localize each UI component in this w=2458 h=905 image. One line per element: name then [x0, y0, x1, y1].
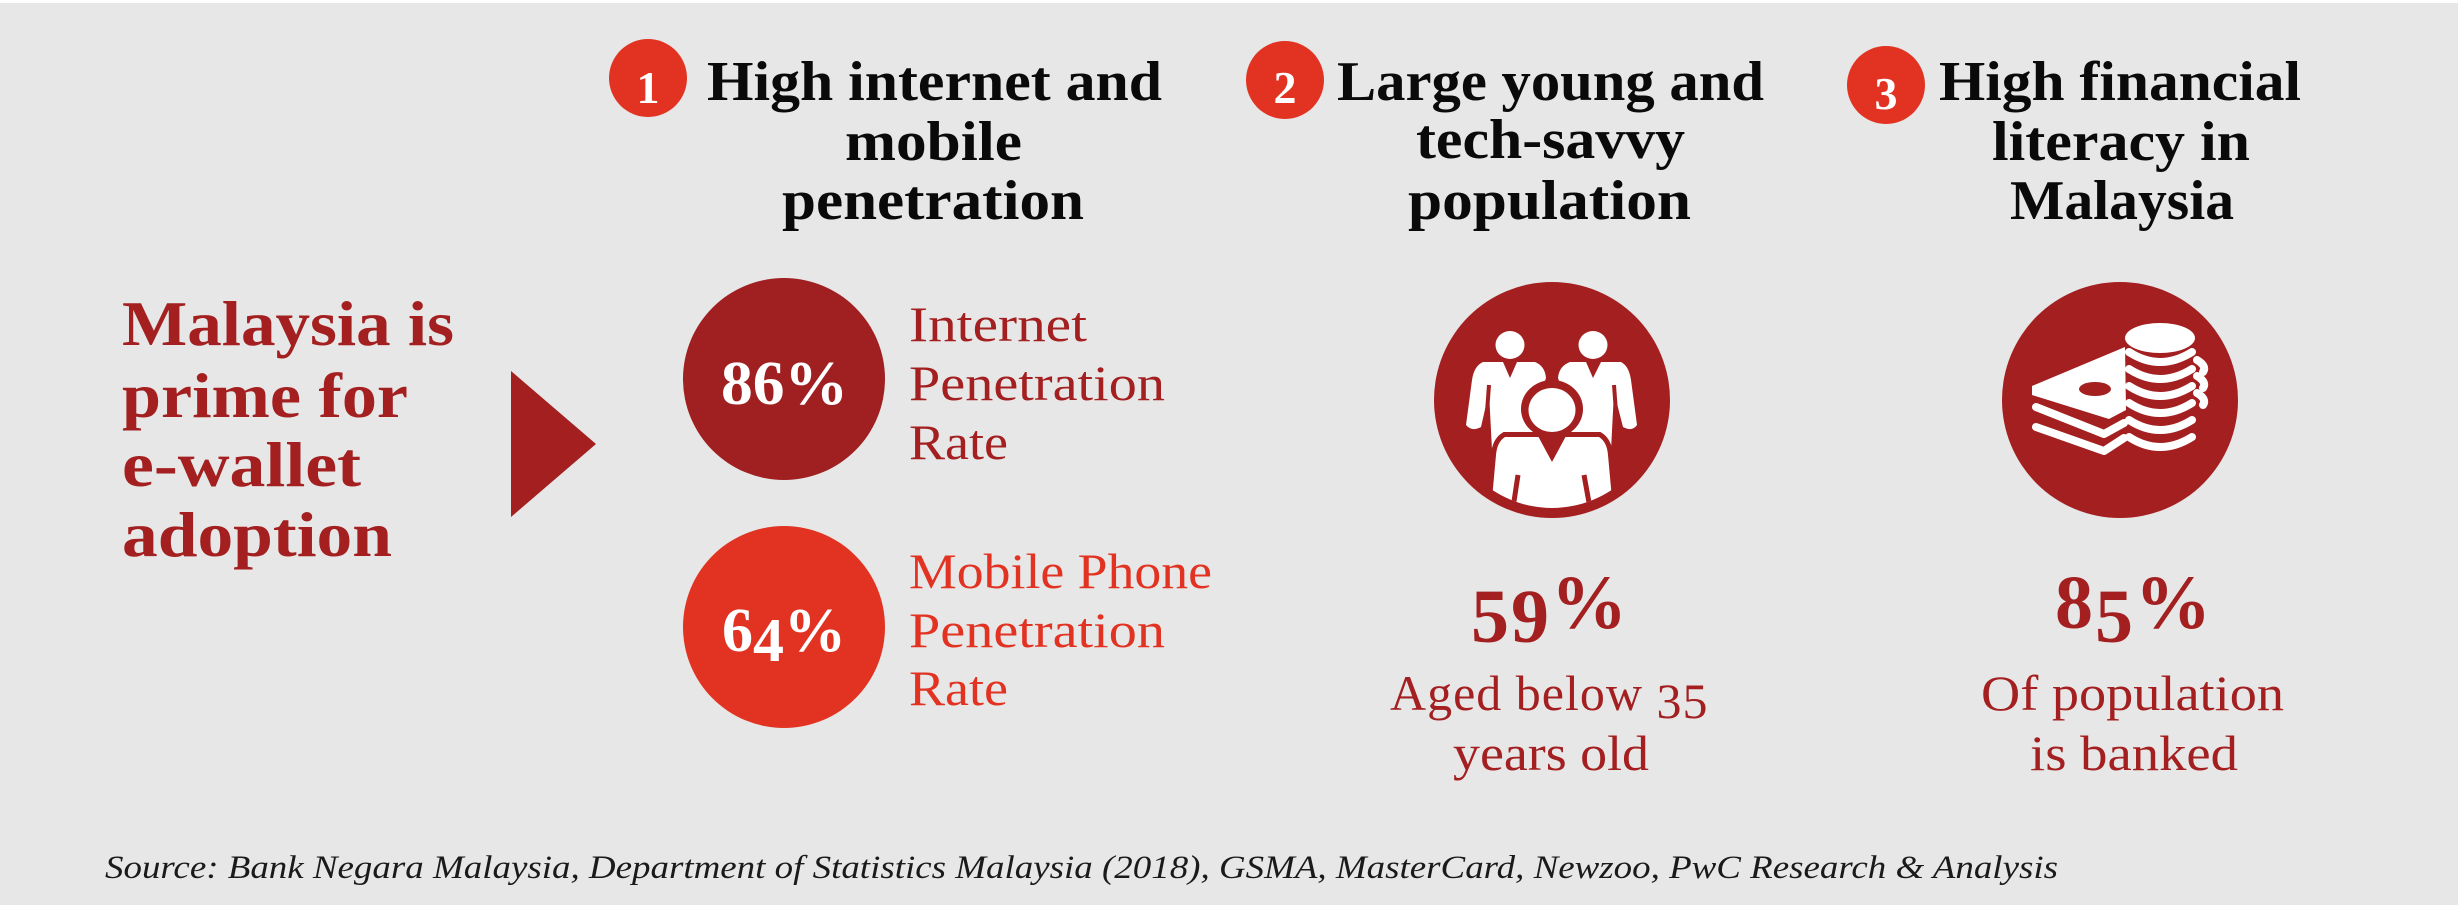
icon: banknotes and coin stack: [2002, 282, 2238, 518]
heading: high internet and mobile penetration: penetration: [782, 170, 1084, 232]
stat: 59%: %: [1551, 561, 1629, 645]
stat: 59%: 59: [1471, 575, 1551, 659]
label: internet penetration rate: [909, 296, 1165, 470]
stat circle: 64%: %: [784, 597, 846, 665]
stat circle: 86%: 86%: [721, 350, 848, 418]
panel: high financial literacy: [1847, 46, 2301, 781]
heading: high financial literacy in Malaysia: literacy in: [1992, 111, 2250, 173]
label: internet penetration rate: Internet: [909, 296, 1087, 352]
label: of population is banked: [1981, 665, 2284, 781]
heading: large young and tech-savvy population: [1337, 51, 1764, 232]
panel: internet and mobile penetration: [609, 39, 1212, 728]
stat: 85%: %: [2135, 561, 2213, 645]
label: of population is banked: Of population: [1981, 665, 2284, 721]
heading: high financial literacy in Malaysia: Malaysia: [2010, 170, 2234, 232]
stat circle: 64%: 4: [753, 607, 784, 675]
number badge 1: 1: [636, 62, 660, 113]
number badge 1: [609, 39, 687, 117]
label: internet penetration rate: Penetration: [909, 355, 1165, 411]
stat circle: 64%: [683, 526, 885, 728]
label: mobile phone penetration rate: Mobile Phone: [909, 543, 1212, 599]
number badge 3: [1847, 46, 1925, 124]
heading: large young and tech-savvy population: Large young and: [1337, 51, 1764, 113]
label: mobile phone penetration rate: Rate: [909, 660, 1008, 716]
stat circle: 86%: [683, 278, 885, 480]
lead statement: e-wallet: [122, 429, 362, 500]
heading: high internet and mobile penetration: High internet and: [707, 51, 1162, 113]
label: aged below 35 years old: years old: [1453, 725, 1649, 781]
arrow: triangle pointing right: [511, 371, 596, 517]
lead statement: adoption: [122, 499, 392, 570]
lead statement: Malaysia is: [122, 288, 454, 359]
panel: young and tech-savvy population: [1246, 41, 1764, 781]
label: mobile phone penetration rate: Penetration: [909, 602, 1165, 658]
number badge 2: 2: [1274, 62, 1296, 113]
heading: large young and tech-savvy population: population: [1408, 170, 1691, 232]
label: aged below 35 years old: Aged below: [1390, 665, 1643, 721]
number badge 3: 3: [1874, 68, 1898, 119]
label: internet penetration rate: Rate: [909, 414, 1008, 470]
label: mobile phone penetration rate: [909, 543, 1212, 716]
label: aged below 35 years old: [1390, 665, 1708, 781]
heading: large young and tech-savvy population: tech-savvy: [1416, 109, 1685, 171]
stat: 85%: 5: [2095, 575, 2135, 659]
stat: 85%: 8: [2055, 561, 2095, 645]
number badge 2: [1246, 41, 1324, 119]
heading: high financial literacy in Malaysia: High financial: [1939, 51, 2301, 113]
stat circle: 64%: 6: [722, 597, 753, 665]
label: aged below 35 years old: 35: [1656, 673, 1708, 729]
lead statement: [122, 288, 454, 570]
icon: group of people: [1434, 282, 1670, 518]
heading: high internet and mobile penetration: mobile: [845, 111, 1022, 173]
heading: high internet and mobile penetration: [707, 51, 1162, 232]
label: of population is banked: is banked: [2030, 725, 2238, 781]
lead statement: prime for: [122, 360, 408, 431]
heading: high financial literacy in Malaysia: [1939, 51, 2301, 232]
source note: Source: Bank Negara Malaysia, Department of Statistics Malaysia (2018), GSMA, MasterCard, Newzoo, PwC Research & Analysis: [105, 850, 2058, 886]
